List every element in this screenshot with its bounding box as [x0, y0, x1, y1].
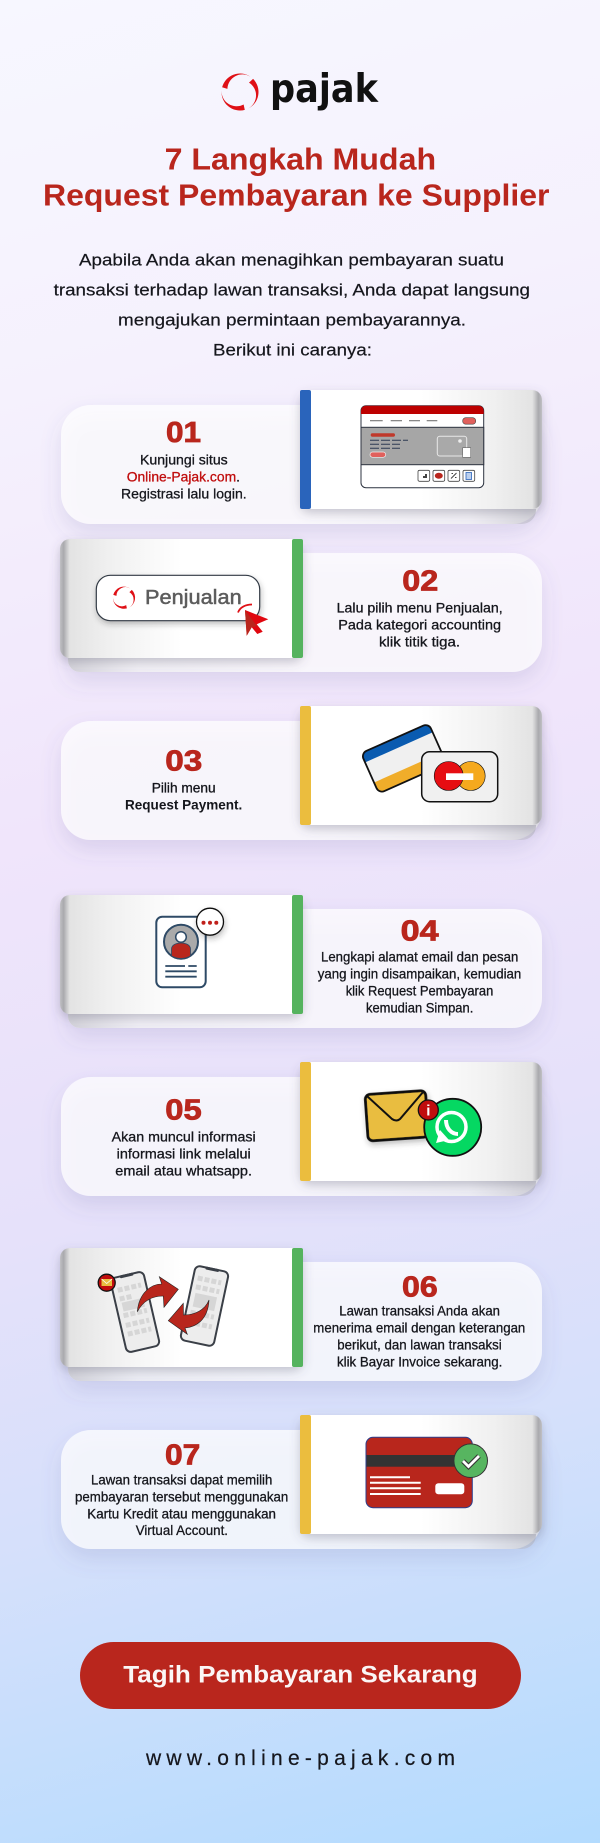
icon: Penjualan button with cursor: Penjualan [145, 586, 242, 609]
step 7 pill [61, 1430, 542, 1549]
step 7 [61, 1415, 542, 1549]
step 1 panel [300, 390, 542, 509]
step 3 text: Pilih menu [152, 779, 216, 795]
step 5 text: Akan muncul informasi [112, 1128, 256, 1144]
step 7 text: Kartu Kredit atau menggunakan [87, 1506, 276, 1522]
intro paragraph: mengajukan permintaan pembayarannya. [118, 311, 466, 330]
step 6 number: 06 [402, 1271, 438, 1303]
icon: envelope and WhatsApp: i [426, 1102, 430, 1120]
step 4 number: 04 [401, 915, 439, 947]
right phone [180, 1264, 229, 1347]
step 7 number: 07 [165, 1439, 200, 1471]
step 6 pill [68, 1262, 542, 1381]
icon: browser window [361, 406, 484, 488]
title: Request Pembayaran ke Supplier [43, 178, 550, 213]
step 2 number: 02 [402, 566, 438, 598]
step 1 stripe [300, 390, 311, 509]
step 1 text: Online-Pajak.com. [127, 468, 240, 484]
step 7 stripe [300, 1415, 311, 1534]
intro paragraph: Berikut ini caranya: [213, 340, 372, 359]
call to action button: Tagih Pembayaran Sekarang [123, 1662, 478, 1689]
title: 7 Langkah Mudah [165, 141, 436, 176]
step 7 text [75, 1472, 288, 1538]
step 6 [60, 1248, 542, 1381]
step 3 number: 03 [165, 745, 202, 777]
step 5 text [112, 1128, 256, 1178]
logo: pajak [219, 67, 379, 117]
step 4 panel [60, 895, 303, 1014]
website url: www.online-pajak.com [145, 1747, 455, 1770]
step 1 pill [61, 405, 542, 524]
step 6 stripe [292, 1248, 303, 1367]
intro paragraph: Apabila Anda akan menagihkan pembayaran suatu [79, 251, 504, 270]
step 5 pill [61, 1077, 542, 1196]
step 4 text: Lengkapi alamat email dan pesan [321, 949, 518, 965]
icon: profile document with chat bubble [156, 908, 224, 987]
step 1 curl shade [311, 509, 536, 524]
icon: phones exchanging arrows [98, 1264, 229, 1353]
step 5 [61, 1062, 542, 1196]
step 2 text: Pada kategori accounting [338, 616, 501, 632]
icon: credit card with check [366, 1437, 488, 1508]
step 4 text: klik Request Pembayaran [346, 983, 493, 999]
intro paragraph [54, 251, 530, 359]
step 1 text: Kunjungi situs [140, 451, 228, 467]
step 7 curl shade [311, 1534, 536, 1549]
step 5 text: informasi link melalui [117, 1145, 251, 1161]
icon: payment cards [362, 724, 498, 802]
step 7 panel [300, 1415, 542, 1534]
step 4 curl shade [68, 1014, 303, 1028]
step 6 text: klik Bayar Invoice sekarang. [337, 1353, 502, 1369]
step 3 curl shade [311, 825, 536, 840]
call to action button [80, 1642, 521, 1709]
step 6 curl shade [68, 1367, 303, 1381]
step 5 number: 05 [165, 1094, 202, 1126]
title [43, 141, 550, 213]
logo wordmark: pajak [270, 67, 379, 112]
step 4 text: yang ingin disampaikan, kemudian [318, 966, 521, 982]
step 4 text: kemudian Simpan. [366, 1000, 473, 1016]
step 4 pill [68, 909, 542, 1028]
intro paragraph: transaksi terhadap lawan transaksi, Anda dapat langsung [54, 281, 530, 300]
step 2 text [337, 599, 503, 649]
step 7 text: Lawan transaksi dapat memilih [91, 1472, 272, 1488]
step 3 [61, 706, 542, 840]
step 3 stripe [300, 706, 311, 825]
icon: Penjualan button with cursor [96, 575, 268, 636]
step 3 text [125, 779, 242, 812]
mail badge [98, 1274, 115, 1291]
step 6 panel [60, 1248, 303, 1367]
step 2 pill [68, 553, 542, 672]
step 2 text: Lalu pilih menu Penjualan, [337, 599, 503, 615]
step 1 number: 01 [166, 417, 201, 449]
step 6 text: berikut, dan lawan transaksi [337, 1336, 502, 1352]
step 2 curl shade [68, 658, 303, 672]
step 1 [61, 390, 542, 524]
step 3 pill [61, 721, 542, 840]
step 6 text: Lawan transaksi Anda akan [339, 1302, 500, 1318]
step 5 panel [300, 1062, 542, 1181]
left phone [110, 1270, 160, 1353]
step 7 text: pembayaran tersebut menggunakan [75, 1489, 288, 1505]
arrow right [137, 1277, 178, 1312]
icon: envelope and WhatsApp [365, 1090, 481, 1156]
step 2 [60, 539, 542, 672]
step 2 stripe [292, 539, 303, 658]
step 4 text [318, 949, 521, 1016]
step 4 stripe [292, 895, 303, 1014]
step 5 text: email atau whatsapp. [115, 1162, 252, 1178]
step 4 [60, 895, 542, 1028]
step 1 text [121, 451, 247, 501]
step 7 text: Virtual Account. [136, 1522, 228, 1538]
step 2 text: klik titik tiga. [379, 633, 460, 649]
step 5 stripe [300, 1062, 311, 1181]
step 2 panel [60, 539, 303, 658]
step 3 panel [300, 706, 542, 825]
step 1 text: Registrasi lalu login. [121, 485, 247, 501]
step 6 text: menerima email dengan keterangan [313, 1319, 525, 1335]
step 3 text: Request Payment. [125, 796, 242, 812]
arrow left [168, 1300, 209, 1334]
step 5 curl shade [311, 1181, 536, 1196]
step 6 text [313, 1302, 525, 1369]
logo mark [219, 74, 265, 117]
